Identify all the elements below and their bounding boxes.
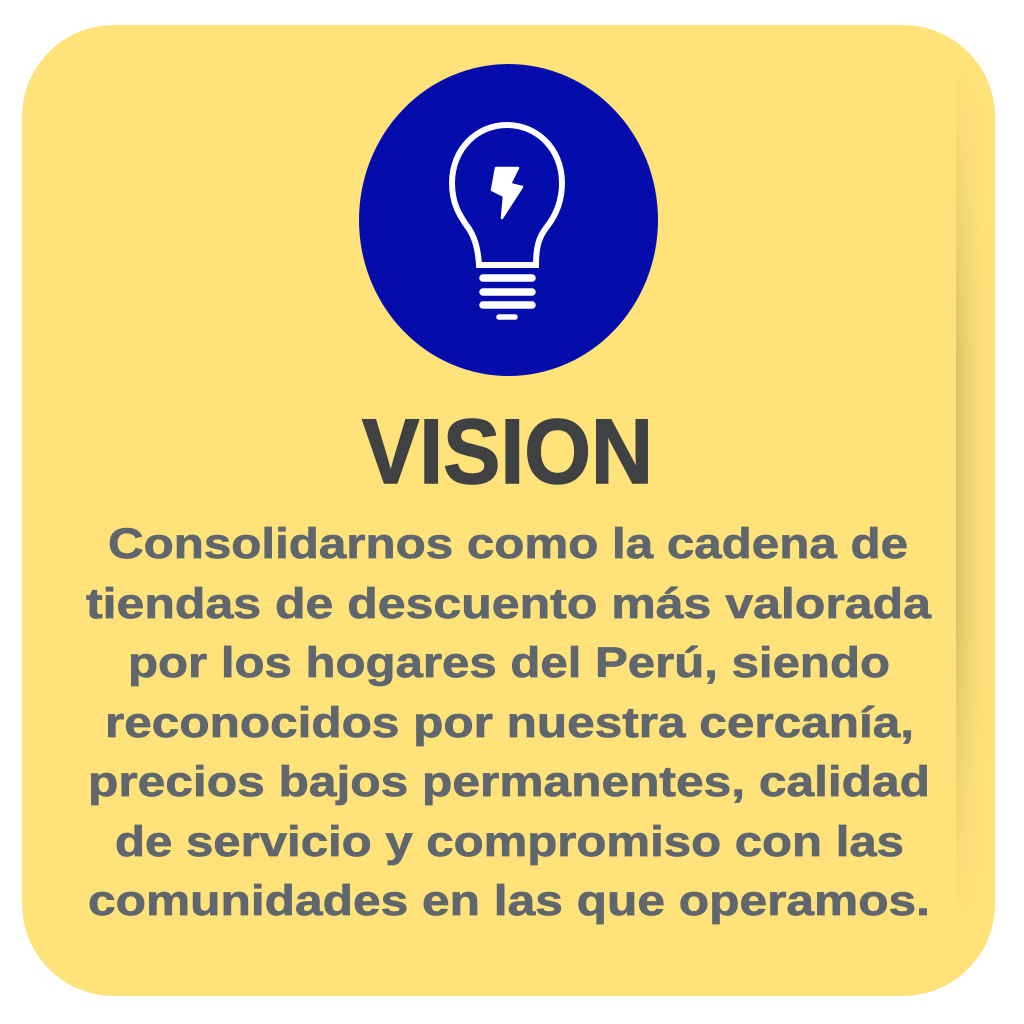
bulb outline — [452, 125, 562, 265]
icon: light bulb in blue circle — [359, 64, 658, 376]
vision statement text: Consolidarnos como la cadena de — [108, 520, 908, 568]
card edge shadow — [956, 130, 978, 850]
heading: VISION — [362, 401, 653, 503]
vision statement text: reconocidos por nuestra cercanía, — [105, 699, 914, 747]
vision statement text: por los hogares del Perú, siendo — [128, 639, 890, 687]
vision statement text — [86, 520, 932, 925]
bulb base — [483, 278, 532, 317]
blue circle — [359, 64, 658, 376]
lightning bolt — [492, 168, 522, 218]
vision statement text: tiendas de descuento más valorada — [86, 580, 932, 628]
vision statement text: de servicio y compromiso con las — [115, 818, 904, 866]
vision statement text: comunidades en las que operamos. — [88, 877, 930, 925]
vision statement text: precios bajos permanentes, calidad — [88, 758, 930, 806]
